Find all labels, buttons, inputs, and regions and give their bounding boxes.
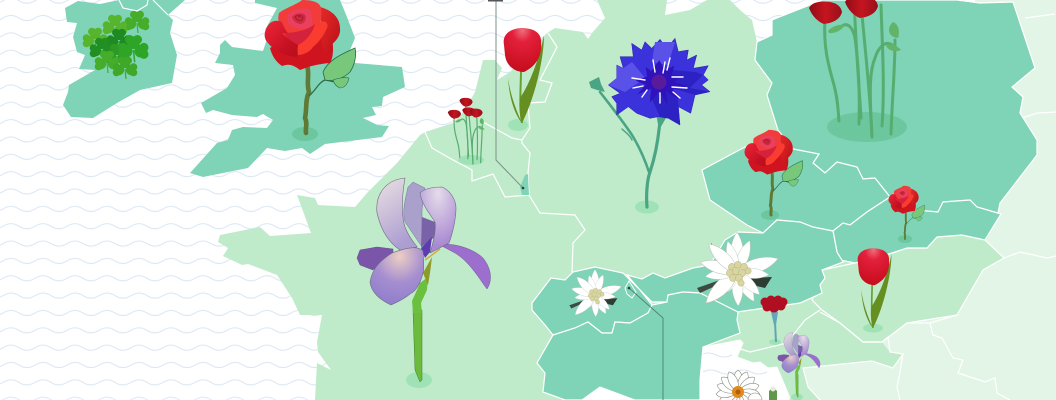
icon: cornflower Germany [589,38,710,213]
icon: poppies Poland [809,0,907,142]
panel: light eastern countries [800,0,1056,400]
icon: tulip Hungary [858,248,891,332]
icon: rose Czech Republic [745,130,803,220]
icon: tulip Netherlands [504,28,544,131]
country borders [425,33,585,272]
icon: daisy Italy [716,370,777,400]
panel: Czech Republic [702,147,890,233]
icon: shamrock Ireland [83,11,149,79]
Liechtenstein highlight [625,281,636,298]
panel: mid-green Hungary and Croatia [737,235,1004,400]
icon: rose Slovakia [888,186,925,243]
leader line: Luxembourg [488,0,524,189]
panel: Slovakia [833,197,1001,263]
panel: Adriatic sea waves [700,353,767,374]
panel: sea notch south of Italy [582,387,635,400]
panel: Ireland [63,0,185,118]
icon: edelweiss Austria [697,232,780,308]
panel: Italy [537,292,740,400]
icon: iris Croatia [777,332,820,400]
panel: Switzerland [532,267,652,335]
panel: United Kingdom [190,0,405,177]
icon: edelweiss Switzerland [569,269,623,318]
panel: Adriatic sea [700,340,790,400]
panel: Poland [755,0,1037,214]
panel: Austria [627,220,843,312]
icon: rose UK [265,0,356,141]
panel: mid-green western and central Europe [218,0,1004,400]
icon: poppies Belgium [448,98,485,165]
icon: carnation Slovenia [760,296,788,345]
leader line: Liechtenstein [628,287,663,400]
Luxembourg highlight [520,174,529,195]
icon: iris France [357,178,490,388]
